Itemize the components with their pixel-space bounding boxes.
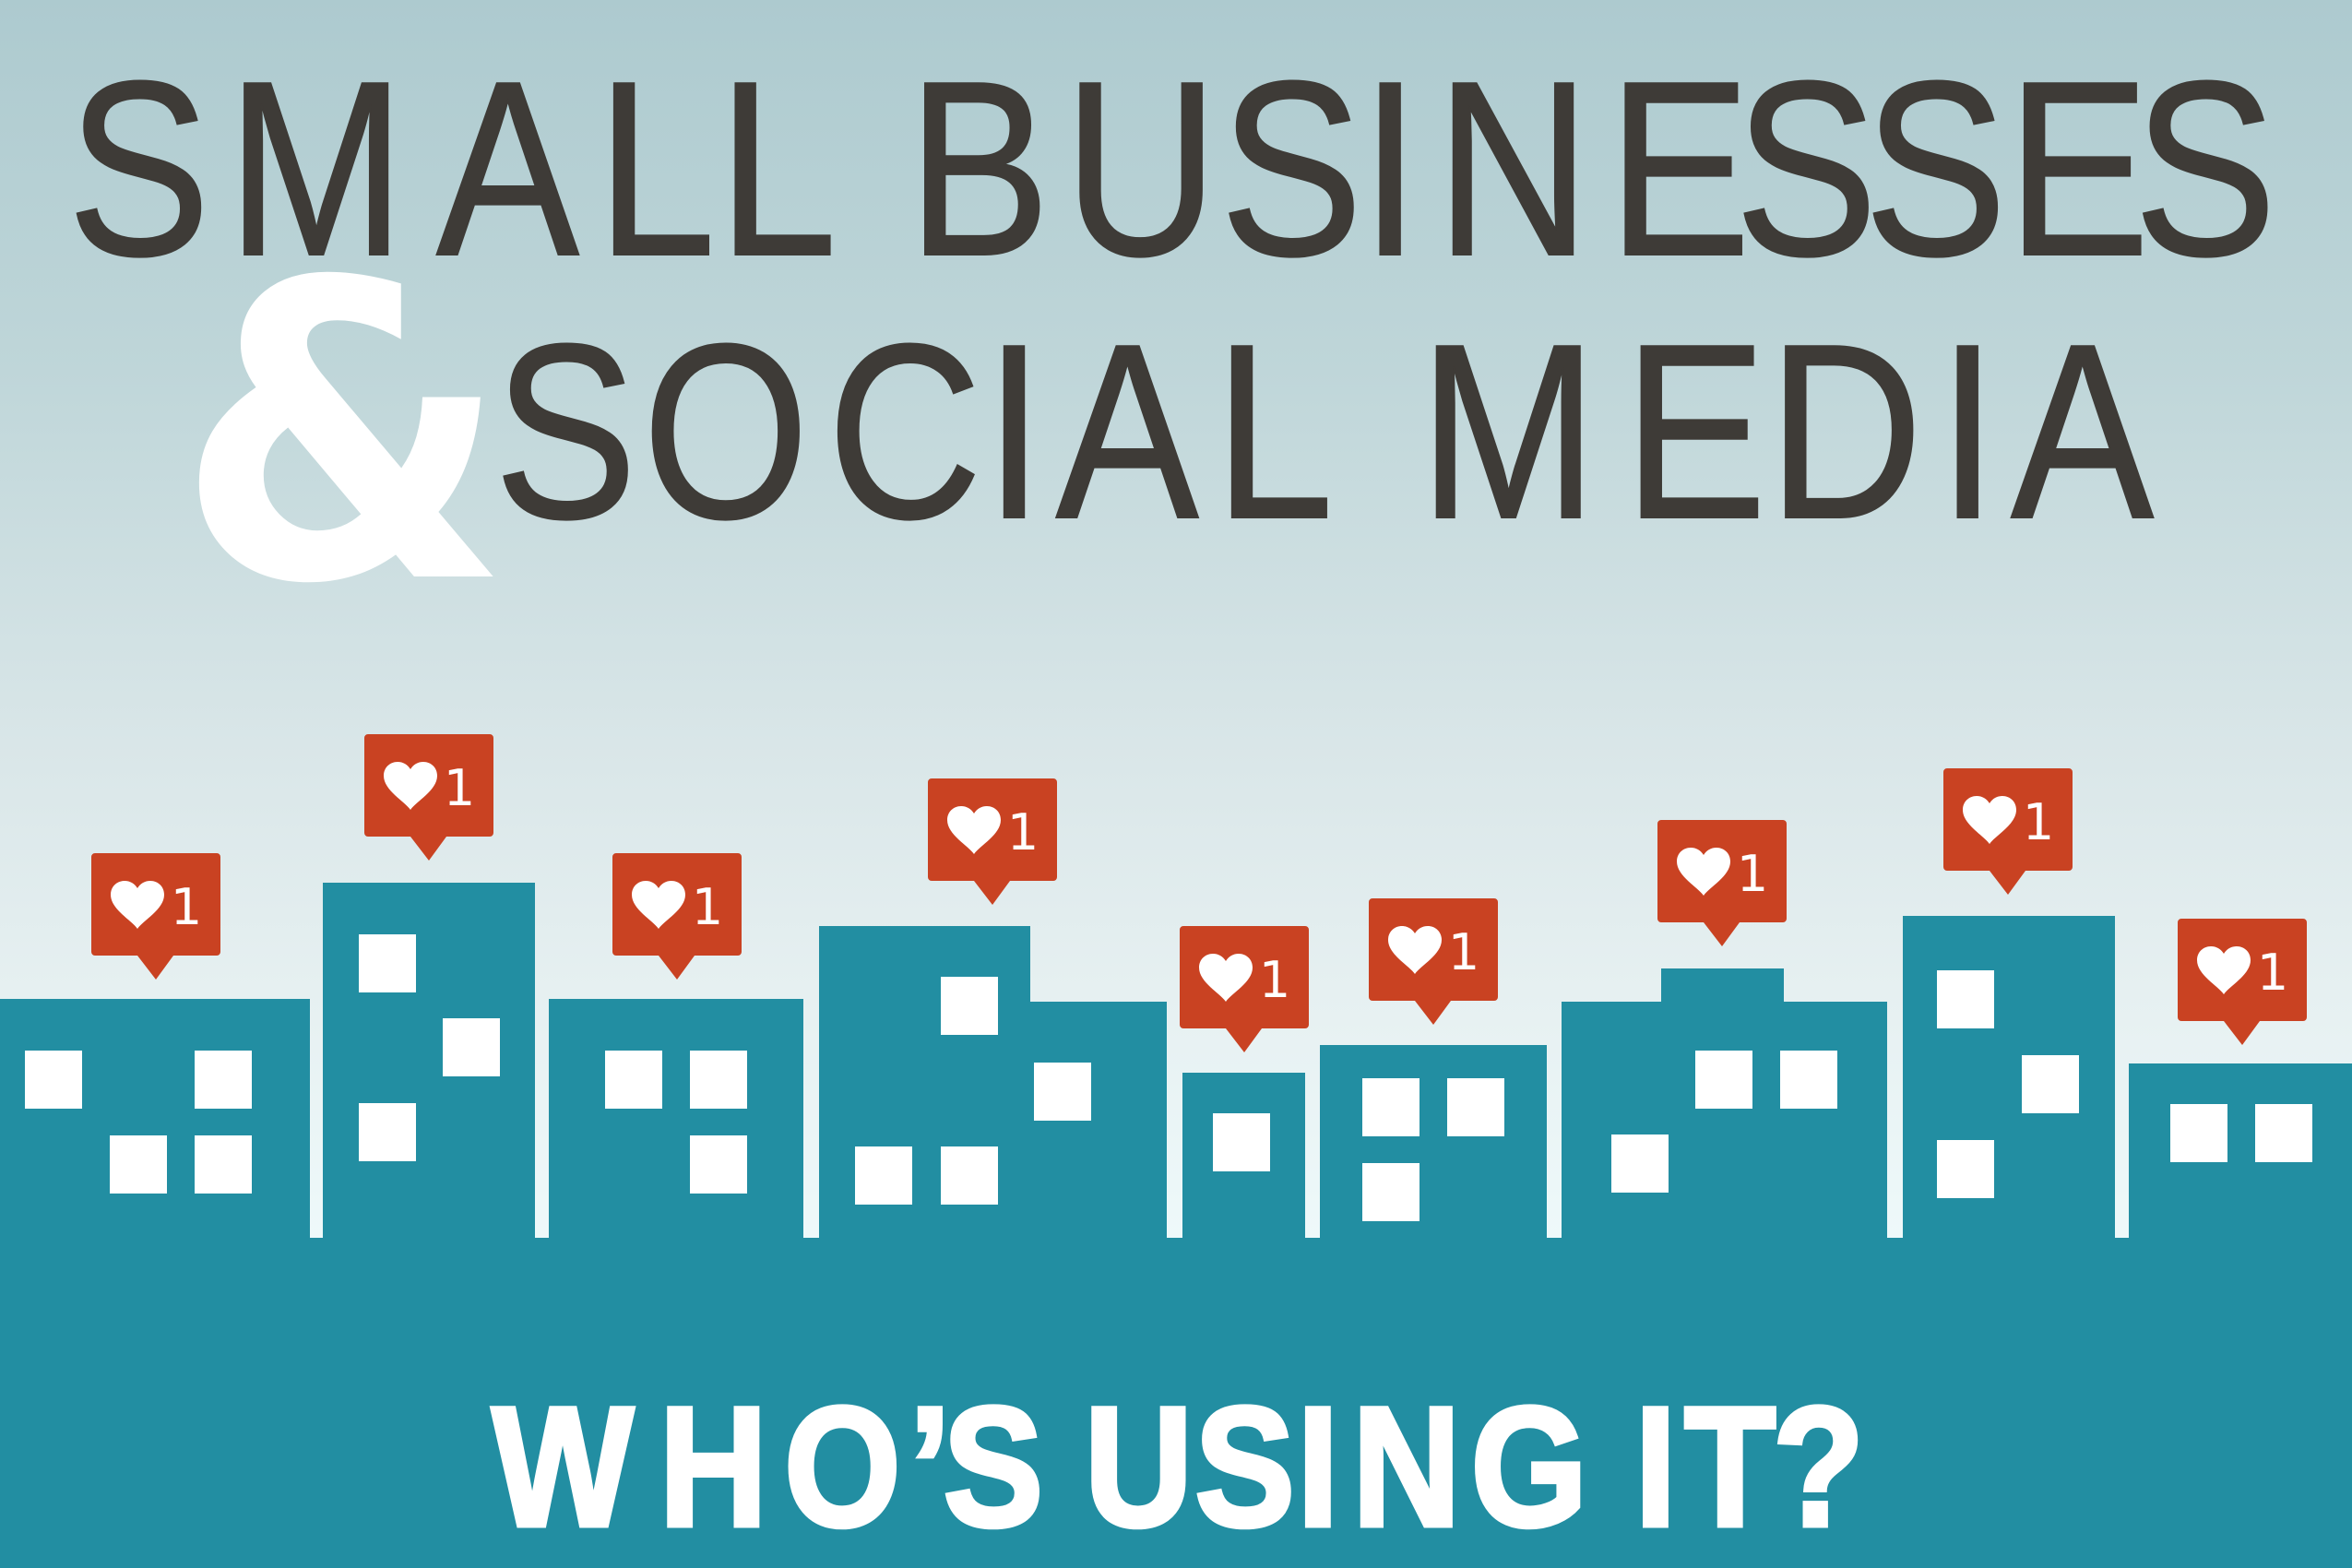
- section heading: WHO’S USING IT?: [492, 1371, 1864, 1562]
- like badge 3: [612, 853, 742, 980]
- like badge 9: [2178, 919, 2307, 1045]
- building 9: [2129, 1063, 2352, 1239]
- like badge 1: 1: [171, 878, 202, 936]
- like badge 8: [1943, 768, 2073, 895]
- like badge 7: [1657, 820, 1787, 946]
- building 1: [0, 999, 310, 1239]
- teal skyline with buildings: [0, 883, 2352, 1568]
- like badge 5: [1180, 926, 1309, 1052]
- building 8: [1903, 916, 2115, 1239]
- like badge 8: 1: [2023, 793, 2054, 851]
- like badge 6: 1: [1448, 923, 1479, 981]
- like badge 3: 1: [692, 878, 723, 936]
- like badge 2: 1: [444, 759, 475, 817]
- like badge 5: 1: [1259, 951, 1290, 1009]
- building 3: [549, 999, 803, 1239]
- ampersand: &: [176, 196, 509, 673]
- building 4: [819, 926, 1167, 1239]
- like badge 2: [364, 734, 493, 861]
- ground band: [0, 1238, 2352, 1568]
- title line 2: SOCIAL MEDIA: [494, 293, 2154, 571]
- like badge 4: [928, 778, 1057, 905]
- building 2: [323, 883, 535, 1239]
- like badge 4: 1: [1007, 803, 1039, 861]
- title line 1: SMALL BUSINESSES: [67, 30, 2276, 308]
- like badge 6: [1369, 898, 1498, 1025]
- like badge 9: 1: [2257, 944, 2288, 1002]
- building 7: [1562, 968, 1887, 1239]
- like badge 7: 1: [1737, 845, 1768, 903]
- building 5: [1182, 1073, 1305, 1239]
- like badge 1: [91, 853, 220, 980]
- building 6: [1320, 1045, 1547, 1239]
